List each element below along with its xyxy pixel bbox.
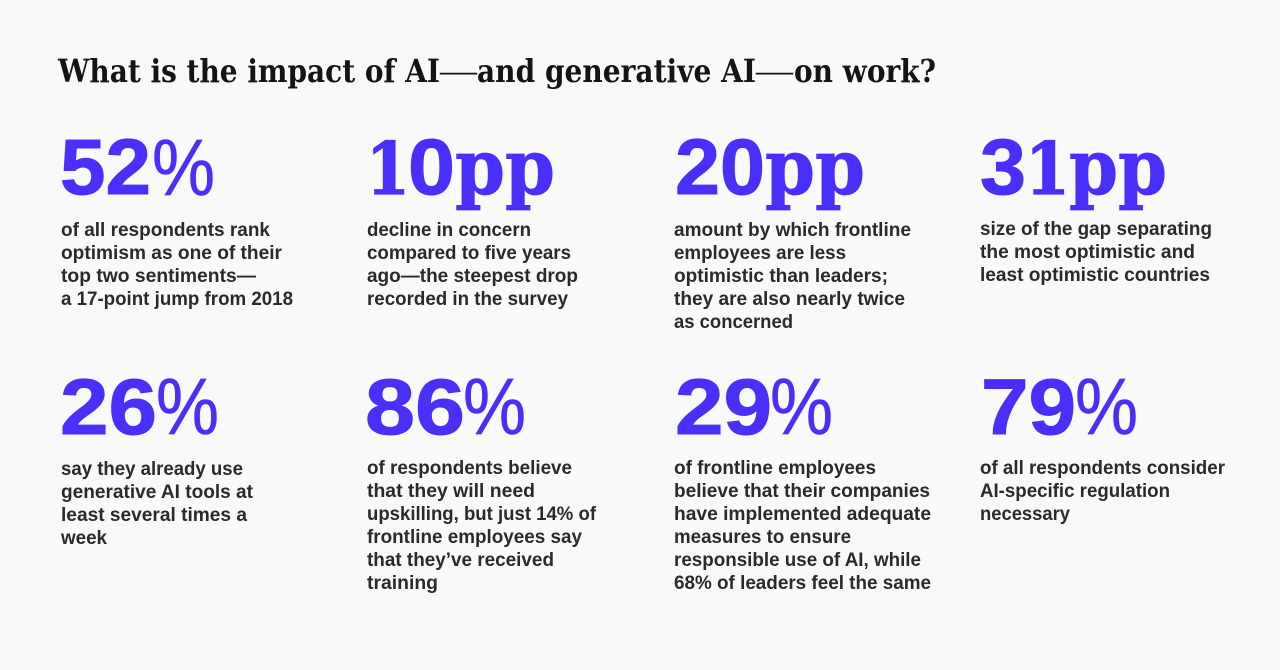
statistic: 26%: % <box>156 362 219 451</box>
description: 31pp <box>980 218 1212 286</box>
statistic: 52%: 52 <box>60 122 151 211</box>
panel: 31pp countries <box>980 122 1212 286</box>
statistic: 86%: 86 <box>365 362 465 451</box>
statistic: 10pp: pp <box>455 123 555 213</box>
statistic: 31pp: pp <box>1069 123 1167 213</box>
description: 52%: a 17-point jump from 2018 <box>61 288 293 310</box>
description: 79% <box>980 457 1225 525</box>
statistic: 10pp: 0 <box>408 122 455 211</box>
description: 52%: optimism as one of their <box>61 242 282 264</box>
statistic: 79%: 79 <box>981 362 1076 451</box>
title: — <box>439 50 478 90</box>
description: 52% <box>61 219 293 310</box>
description: 29%: 68% of leaders feel the same <box>674 572 931 594</box>
description: 10pp: decline in concern <box>367 219 531 241</box>
title <box>57 50 936 90</box>
panel: 20pp frontline <box>674 122 911 333</box>
description: 20pp <box>674 219 911 333</box>
panel: 29% responsible use <box>674 362 931 594</box>
description: 52%: of all respondents rank <box>61 219 271 241</box>
description: 86%: that they will need <box>367 480 535 502</box>
description: 20pp: optimistic than leaders; <box>674 265 888 287</box>
description: 29%: measures to ensure <box>674 526 851 548</box>
description: 86%: upskilling, but just 14% of <box>367 503 596 525</box>
description: 86%: training <box>367 572 438 594</box>
statistic: 86% <box>365 362 526 451</box>
statistic: 29% <box>675 362 833 451</box>
description: 79%: AI-specific regulation <box>980 480 1170 502</box>
description: 29%: of frontline employees <box>674 457 876 479</box>
statistic: 31pp: 1 <box>1025 126 1070 211</box>
panel: 26% usage <box>60 362 253 549</box>
description: 79%: necessary <box>980 503 1070 525</box>
statistic: 20pp: pp <box>765 123 865 213</box>
description: 86% <box>367 457 596 594</box>
statistic: 29%: 29 <box>675 362 772 451</box>
statistic: 29%: % <box>770 362 833 451</box>
description: 20pp: they are also nearly twice <box>674 288 905 310</box>
description: 26%: week <box>60 527 108 549</box>
statistic: 31pp <box>980 122 1167 213</box>
statistic: 86%: % <box>463 362 526 451</box>
panel: 52% optimism <box>60 122 293 310</box>
description: 52%: top two sentiments— <box>61 265 256 287</box>
description: 10pp: ago—the steepest drop <box>367 265 578 287</box>
description: 86%: that they’ve received <box>367 549 554 571</box>
statistic: 79%: % <box>1075 362 1138 451</box>
description: 29%: believe that their companies <box>674 480 930 502</box>
title: What is the impact of AI <box>57 52 440 90</box>
panel: 10pp concern <box>366 122 578 310</box>
description: 20pp: amount by which frontline <box>674 219 911 241</box>
description: 10pp <box>367 219 578 310</box>
title: and generative AI <box>477 52 756 90</box>
description: 31pp: least optimistic countries <box>980 264 1210 286</box>
description: 10pp: compared to five years <box>367 242 571 264</box>
statistic: 31pp: 3 <box>980 122 1026 211</box>
statistic: 10pp <box>366 122 555 213</box>
statistic: 26% <box>60 362 219 451</box>
description: 31pp: size of the gap separating <box>980 218 1212 240</box>
statistic: 52% <box>60 122 215 212</box>
description: 86%: of respondents believe <box>367 457 572 479</box>
statistic: 20pp <box>675 122 865 213</box>
description: 20pp: employees are less <box>674 242 846 264</box>
description: 26% <box>60 458 253 549</box>
panel: 79% regulation <box>980 362 1225 525</box>
description: 26%: least several times a <box>61 504 248 526</box>
description: 29% <box>674 457 931 594</box>
description: 26%: say they already use <box>61 458 243 480</box>
panel: 86% upskilling <box>365 362 596 594</box>
description: 29%: responsible use of AI, while <box>674 549 921 571</box>
statistic: 10pp: 1 <box>366 126 410 211</box>
title: on work? <box>794 52 936 90</box>
description: 79%: of all respondents consider <box>980 457 1225 479</box>
statistic: 26%: 26 <box>60 362 157 451</box>
title: — <box>755 50 794 90</box>
description: 29%: have implemented adequate <box>674 503 931 525</box>
description: 10pp: recorded in the survey <box>367 288 568 310</box>
description: 31pp: the most optimistic and <box>980 241 1195 263</box>
description: 86%: frontline employees say <box>367 526 582 548</box>
statistic: 79% <box>981 362 1138 451</box>
statistic: 20pp: 20 <box>675 122 765 211</box>
description: 26%: generative AI tools at <box>61 481 253 503</box>
statistic: 52%: % <box>152 123 215 212</box>
description: 20pp: as concerned <box>674 311 793 333</box>
